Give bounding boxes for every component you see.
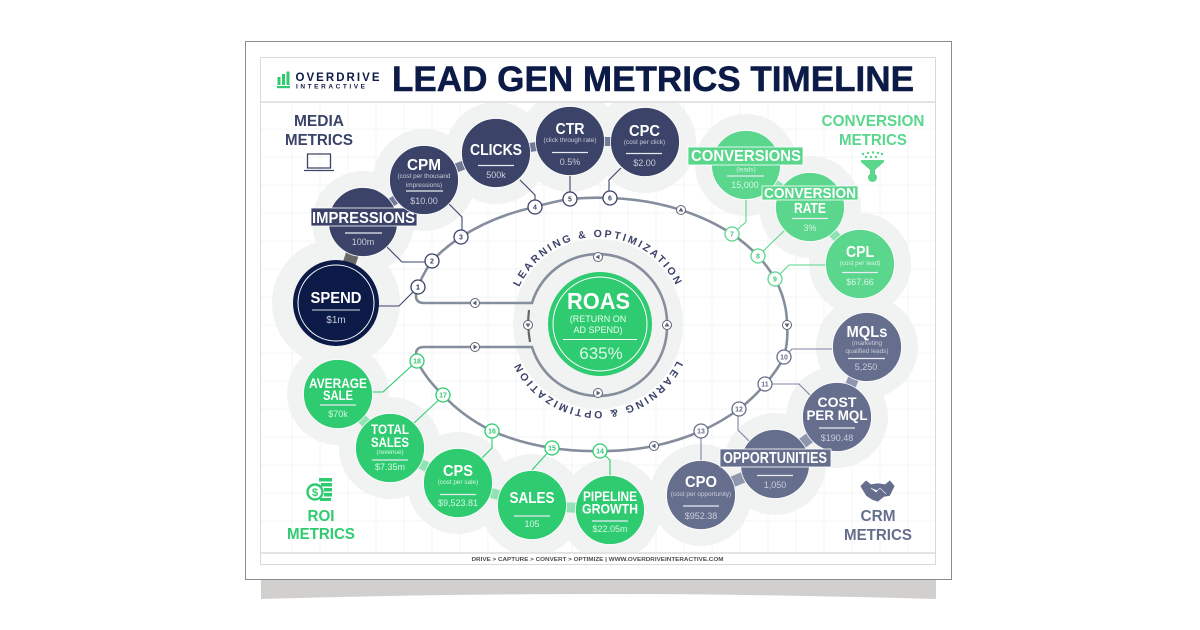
numbered nodes: CRM	[694, 350, 791, 438]
metric: CPS: $9,523.81	[438, 498, 478, 508]
curved text: learning and optimization top: LEARNING & OPTIMIZATION	[513, 230, 682, 286]
metric: MQLs	[832, 312, 902, 382]
ROAS ring path	[528, 254, 667, 396]
metric: CTR: (click through rate)	[544, 137, 596, 144]
metric: opportunities: OPPORTUNITIES	[723, 450, 827, 467]
metric: average sale: SALE	[323, 388, 353, 403]
halos behind metric circles	[272, 90, 918, 561]
icon: funnel	[861, 151, 884, 182]
metric: pipeline growth: $22.05m	[592, 524, 628, 534]
metric: MQLs: (marketing	[852, 340, 883, 347]
metric: CPC: $2.00	[633, 158, 656, 168]
metric: total sales: (revenue)	[376, 449, 404, 456]
metric: CPC: CPC	[629, 123, 660, 140]
metric: MQLs: qualified leads)	[846, 348, 888, 355]
metric: total sales: SALES	[371, 435, 409, 450]
numbered nodes: ROI: 15	[548, 446, 556, 452]
metric: CPL: $67.66	[846, 277, 874, 287]
metric: spend: $1m	[326, 315, 346, 326]
ROI metrics label	[287, 478, 355, 543]
metric: CPO: CPO	[685, 474, 717, 491]
logo: INTERACTIVE	[296, 84, 366, 90]
poster frame	[246, 42, 952, 580]
metric: conversion rate: CONVERSION	[764, 186, 856, 202]
metric: CPO: (cost per opportunity)	[671, 491, 731, 498]
metric: total sales: TOTAL	[371, 422, 409, 437]
metric: pipeline growth: GROWTH	[582, 502, 638, 516]
numbered nodes: CRM: 13	[697, 428, 705, 436]
connectors between circles	[336, 141, 867, 510]
numbered nodes: conversion	[725, 227, 782, 286]
timeline path	[416, 198, 787, 451]
metric: CPS: CPS	[443, 463, 473, 480]
metric: CPL	[826, 230, 894, 298]
ROI metrics label: ROI	[308, 508, 334, 525]
numbered nodes: ROI: 16	[488, 428, 496, 436]
metric: sales	[498, 470, 566, 540]
numbered nodes: CRM: 12	[735, 406, 743, 414]
metric: CPO	[666, 460, 736, 530]
CRM metrics label: CRM	[860, 508, 896, 525]
numbered nodes: conversion: 8	[756, 254, 760, 260]
poster body	[260, 58, 936, 564]
metric: MQLs: 5,250	[855, 362, 877, 372]
numbered nodes: conversion: 7	[730, 232, 734, 238]
ROI metrics label: METRICS	[287, 526, 355, 543]
numbered nodes: media: 2	[430, 258, 434, 266]
CRM metrics label: METRICS	[844, 527, 912, 544]
metric: cost per MQL: PER MQL	[806, 408, 868, 423]
metric: CPS	[424, 448, 492, 518]
metric: average sale: AVERAGE	[309, 376, 367, 391]
numbered nodes: CRM: 11	[761, 382, 769, 388]
metric: CPL: CPL	[846, 244, 874, 261]
metric: MQLs: MQLs	[846, 324, 888, 341]
numbered nodes: conversion: 9	[773, 276, 777, 284]
metric: impressions: IMPRESSIONS	[312, 210, 415, 227]
metric: CPS: (cost per sale)	[438, 479, 478, 486]
numbered nodes: media: 4	[533, 204, 537, 212]
footer text: DRIVE > CAPTURE > CONVERT > OPTIMIZE | WWW.OVERDRIVEINTERACTIVE.COM	[472, 557, 724, 563]
page shadow	[261, 579, 936, 599]
leader lines	[373, 168, 832, 477]
metric: pipeline growth: PIPELINE	[583, 489, 637, 504]
logo	[277, 72, 380, 90]
numbered nodes: ROI: 18	[413, 358, 421, 366]
metric: conversion rate: 3%	[803, 223, 817, 233]
timeline direction arrows	[470, 206, 792, 450]
metric: cost per MQL	[802, 382, 872, 452]
metric: cost per MQL: $190.48	[821, 433, 853, 443]
metric: CPM: $10.00	[410, 196, 438, 206]
metric: opportunities	[720, 430, 831, 498]
metric: clicks	[462, 118, 530, 188]
metric: CTR: CTR	[556, 121, 584, 138]
metric: CPM: impressions)	[406, 182, 442, 189]
conversion metrics label: METRICS	[839, 132, 907, 149]
logo: OVERDRIVE	[296, 72, 380, 84]
media metrics label: MEDIA	[294, 113, 344, 130]
ROAS circle: (RETURN ON	[570, 314, 626, 324]
metric: average sale	[304, 360, 372, 428]
metric: spend	[293, 260, 379, 346]
icon: coins: $	[312, 487, 318, 499]
metric: clicks: 500k	[486, 170, 506, 180]
metric: clicks: CLICKS	[470, 142, 522, 159]
metric: total sales	[356, 414, 424, 482]
numbered nodes: media: 3	[459, 234, 463, 242]
metric: CPM	[390, 146, 458, 214]
metric: conversion rate: RATE	[794, 201, 826, 217]
title: LEAD GEN METRICS TIMELINE	[392, 59, 914, 99]
metric: impressions	[311, 188, 417, 256]
numbered nodes: ROI: 14	[596, 448, 604, 456]
metric: conversion rate	[762, 172, 858, 242]
numbered nodes: media: 1	[416, 284, 420, 292]
metric: spend: SPEND	[310, 290, 362, 307]
icon: laptop	[304, 154, 334, 170]
metric: pipeline growth	[576, 476, 644, 544]
metric: CPM: (cost per thousand	[398, 173, 451, 180]
metric: CPC	[610, 108, 680, 176]
metric: sales: 105	[524, 519, 540, 529]
ROAS circle: AD SPEND)	[573, 325, 623, 335]
metric: conversions: CONVERSIONS	[691, 148, 801, 165]
media metrics label: METRICS	[285, 132, 353, 149]
metric: average sale: $70k	[328, 409, 348, 419]
metric: CPL: (cost per lead)	[840, 260, 880, 267]
icon: handshake	[860, 480, 895, 502]
conversion metrics label: CONVERSION	[822, 113, 924, 130]
numbered nodes: CRM: 10	[780, 354, 788, 362]
metric: CPM: CPM	[407, 157, 441, 174]
numbered nodes: media: 6	[608, 196, 612, 202]
metric: CPC: (cost per click)	[624, 139, 665, 146]
ROAS circle: 635%	[579, 344, 623, 363]
metric: opportunities: 1,050	[764, 480, 786, 490]
metric: CTR: 0.5%	[560, 157, 580, 167]
numbered nodes: ROI	[410, 354, 607, 458]
ROAS circle: ROAS	[567, 288, 630, 314]
metric: CPO: $952.38	[685, 511, 717, 521]
metric: total sales: $7.35m	[375, 462, 405, 472]
CRM metrics label	[844, 480, 912, 544]
media metrics label	[285, 113, 353, 170]
metric: conversions	[688, 130, 803, 200]
metric: conversions: 15,000	[731, 180, 759, 190]
metric: impressions: 100m	[352, 237, 374, 247]
conversion metrics label	[822, 113, 924, 182]
metric: conversions: (leads)	[736, 166, 756, 174]
ROAS circle	[548, 272, 652, 376]
metric: sales: SALES	[510, 490, 554, 507]
numbered nodes: media: 5	[568, 196, 572, 204]
numbered nodes: media	[411, 191, 617, 294]
curved text: learning and optimization bottom: LEARNING & OPTIMIZATION	[514, 361, 683, 418]
numbered nodes: ROI: 17	[439, 392, 447, 400]
metric: CTR	[536, 106, 604, 176]
metric: cost per MQL: COST	[818, 395, 857, 410]
